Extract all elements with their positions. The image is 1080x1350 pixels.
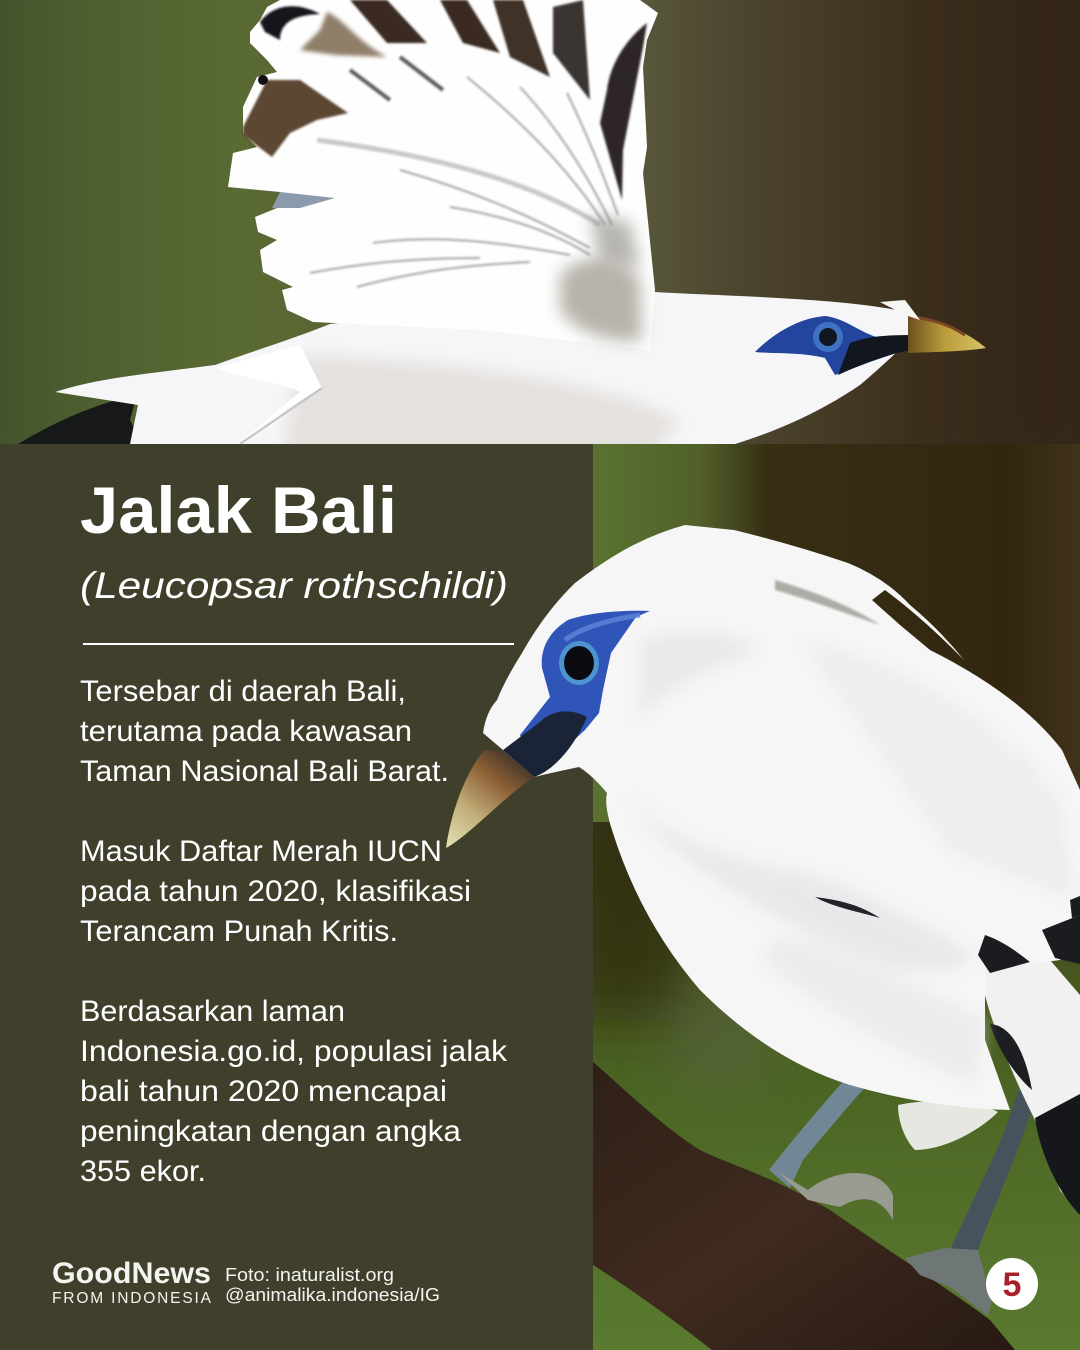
bluish eye patch: [755, 316, 905, 375]
text block: distribution: terutama pada kawasan: [80, 715, 412, 748]
grey feather streaks: [350, 57, 443, 100]
wing fan: [228, 0, 658, 350]
logo: GoodNews from Indonesia: [52, 1257, 212, 1307]
text block: population: Berdasarkan laman: [80, 995, 345, 1028]
text block: IUCN status: Masuk Daftar Merah IUCN: [80, 835, 442, 868]
photo credits: [225, 1265, 440, 1305]
text block: distribution: Taman Nasional Bali Barat.: [80, 755, 449, 788]
photo: flying Bali starling: [18, 0, 986, 470]
text block: population: Indonesia.go.id, populasi jalak: [80, 1035, 508, 1068]
beak: [908, 317, 986, 353]
tail: [980, 960, 1080, 1215]
blue eye patch: [520, 611, 650, 777]
logo: GoodNews from Indonesia: GoodNews: [52, 1257, 211, 1290]
wing black tips: [260, 0, 647, 200]
text block: IUCN status: pada tahun 2020, klasifikasi: [80, 875, 471, 908]
text block: population: [80, 995, 508, 1188]
panel: text background: [0, 444, 593, 1350]
body: [55, 290, 918, 444]
right foot: [905, 1248, 992, 1316]
divider line: [83, 643, 514, 645]
body soft shading: [640, 631, 760, 720]
text block: distribution: Tersebar di daerah Bali,: [80, 675, 406, 708]
under-tail fluff: [898, 1101, 998, 1150]
brown blotch: [243, 80, 348, 157]
photo: background of flying bird: [0, 0, 1080, 480]
text block: population: bali tahun 2020 mencapai: [80, 1075, 447, 1108]
page number badge: 5: [1003, 1266, 1021, 1304]
photo credits: Foto: inaturalist.org: [225, 1265, 394, 1285]
text block: distribution: [80, 675, 449, 788]
page number badge: [986, 1258, 1038, 1310]
crown wisps: [880, 300, 920, 320]
beak: [446, 750, 534, 848]
text block: population: peningkatan dengan angka: [80, 1115, 461, 1148]
black wing mark: [815, 897, 880, 918]
photo: perched Bali starling: [446, 525, 1080, 1316]
feather shafts: [310, 77, 618, 287]
text block: IUCN status: [80, 835, 471, 948]
beak lore: [503, 711, 587, 777]
heading: Jalak Bali: Jalak Bali: [80, 473, 397, 547]
branch: [593, 1062, 1015, 1350]
left foot: [778, 1172, 893, 1220]
left leg: [769, 1015, 917, 1188]
beak lore: [838, 335, 915, 375]
crest grey streaks: [775, 580, 880, 625]
tail black tip: [18, 401, 134, 444]
subheading: scientific name: (Leucopsar rothschildi): [80, 565, 508, 606]
text block: IUCN status: Terancam Punah Kritis.: [80, 915, 398, 948]
logo: GoodNews from Indonesia: FROM INDONESIA: [52, 1290, 212, 1307]
photo credits: @animalika.indonesia/IG: [225, 1285, 440, 1305]
wing shading near shoulder: [590, 215, 640, 268]
text block: population: 355 ekor.: [80, 1155, 206, 1188]
photo: background of perched bird: [560, 444, 1080, 1350]
body and head: [483, 525, 1080, 1110]
right leg: [950, 1090, 1035, 1250]
eye: [559, 641, 599, 685]
brown patch on upper feathers: [300, 12, 387, 57]
